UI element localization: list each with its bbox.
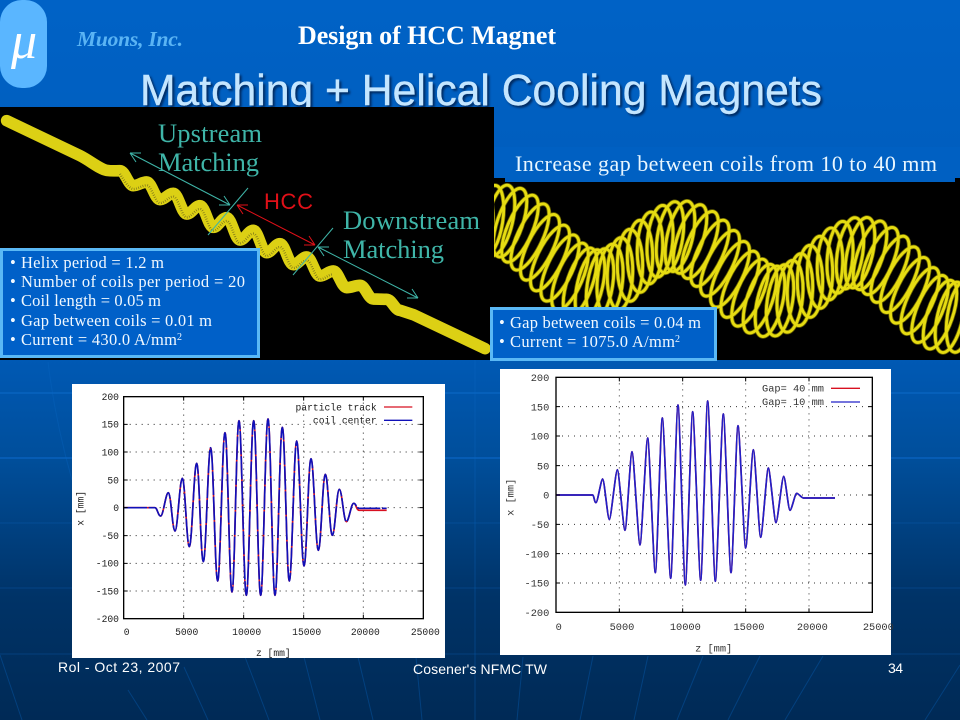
chart: gap 40 mm vs gap 10 mm: 150: [531, 402, 549, 414]
chart: gap 40 mm vs gap 10 mm: -150: [525, 579, 549, 591]
chart: particle track vs coil center: z [mm]: [256, 648, 291, 659]
chart: particle track vs coil center: -100: [96, 559, 119, 570]
title: Matching + Helical Cooling Magnets: [140, 66, 822, 115]
chart: particle track vs coil center: 200: [102, 392, 119, 403]
chart: gap 40 mm vs gap 10 mm: -100: [525, 549, 549, 561]
chart: particle track vs coil center: x [mm]: [75, 491, 86, 526]
label: downstream matching: Matching: [343, 234, 444, 264]
panel: left parameter box: •: [10, 311, 16, 330]
panel: right parameter box: •: [499, 332, 505, 351]
footer: page number: 34: [888, 660, 903, 676]
panel: left parameter box: 2: [177, 332, 182, 343]
chart: particle track vs coil center: particle track: [296, 403, 377, 414]
arrow: upstream matching: [130, 153, 248, 235]
panel: left parameter box: Helix period = 1.2 m: [21, 253, 164, 272]
panel: left parameter box: Gap between coils = 0.01 m: [21, 311, 212, 330]
panel: left parameter box: Coil length = 0.05 m: [21, 291, 161, 310]
label: upstream matching: Upstream: [158, 118, 262, 148]
chart: gap 40 mm vs gap 10 mm: 20000: [797, 622, 828, 634]
chart: particle track vs coil center: -50: [102, 531, 119, 542]
panel: left parameter box: •: [10, 272, 16, 291]
panel: left parameter box: [2, 250, 258, 356]
panel: left parameter box: Current = 430.0 A/mm: [21, 330, 177, 349]
panel: left parameter box: •: [10, 253, 16, 272]
chart: gap 40 mm vs gap 10 mm: [500, 369, 894, 656]
chart: gap 40 mm vs gap 10 mm: 5000: [610, 622, 634, 634]
chart: gap 40 mm vs gap 10 mm: z [mm]: [695, 644, 732, 656]
panel: left parameter box: Number of coils per period = 20: [21, 272, 245, 291]
panel: right parameter box: Gap between coils = 0.04 m: [510, 313, 701, 332]
panel: right parameter box: •: [499, 313, 505, 332]
label: downstream matching: Downstream: [343, 205, 480, 235]
panel: full magnet image: [0, 107, 494, 360]
panel: left parameter box: •: [10, 291, 16, 310]
chart: particle track vs coil center: -150: [96, 586, 119, 597]
chart: gap 40 mm vs gap 10 mm: 15000: [733, 622, 764, 634]
chart: gap 40 mm vs gap 10 mm: x [mm]: [505, 479, 517, 516]
icon: helical magnet overview: [7, 121, 485, 349]
panel: right parameter box: Current = 1075.0 A/mm: [510, 332, 675, 351]
chart: particle track vs coil center: 15000: [292, 627, 321, 638]
chart: particle track vs coil center: 100: [102, 447, 119, 458]
label: downstream matching: [343, 205, 480, 264]
panel: gap heading: [494, 147, 960, 182]
arrow: downstream matching: [293, 228, 418, 298]
chart: gap 40 mm vs gap 10 mm: Gap= 10 mm: [762, 397, 824, 409]
logo: mu badge: [0, 0, 47, 88]
chart: gap 40 mm vs gap 10 mm: -50: [531, 520, 549, 532]
chart: particle track vs coil center: [72, 384, 445, 659]
chart: particle track vs coil center: -200: [96, 614, 119, 625]
chart: gap 40 mm vs gap 10 mm: Gap= 40 mm: [762, 384, 824, 396]
panel: gap heading: Increase gap between coils from 10 to 40 mm: [515, 151, 937, 176]
chart: particle track vs coil center: 5000: [175, 627, 198, 638]
chart: particle track vs coil center: coil center: [313, 415, 377, 426]
chart: gap 40 mm vs gap 10 mm: 0: [556, 622, 562, 634]
chart: gap 40 mm vs gap 10 mm: 50: [537, 461, 549, 473]
panel: left parameter box: •: [10, 330, 16, 349]
chart: gap 40 mm vs gap 10 mm: 200: [531, 373, 549, 385]
chart: particle track vs coil center: 10000: [232, 627, 261, 638]
chart: particle track vs coil center: 25000: [411, 627, 440, 638]
label: upstream matching: [158, 118, 262, 177]
chart: gap 40 mm vs gap 10 mm: -200: [525, 608, 549, 620]
heading: Design of HCC Magnet: [298, 21, 556, 50]
label: HCC: HCC: [264, 189, 313, 214]
company name: Muons, Inc.: [76, 27, 183, 51]
footer: event: Cosener's NFMC TW: [413, 661, 548, 677]
icon: coil close-up: [464, 182, 960, 355]
panel: coil close-up image: [464, 178, 960, 360]
chart: particle track vs coil center: 20000: [351, 627, 380, 638]
label: upstream matching: Matching: [158, 147, 259, 177]
chart: gap 40 mm vs gap 10 mm: 25000: [863, 622, 894, 634]
chart: particle track vs coil center: 0: [124, 627, 130, 638]
footer: date: Rol - Oct 23, 2007: [58, 659, 180, 675]
panel: right parameter box: [492, 308, 716, 360]
chart: gap 40 mm vs gap 10 mm: 0: [543, 491, 549, 503]
chart: gap 40 mm vs gap 10 mm: 10000: [670, 622, 701, 634]
panel: right parameter box: 2: [675, 334, 680, 345]
chart: gap 40 mm vs gap 10 mm: 100: [531, 432, 549, 444]
chart: particle track vs coil center: 0: [113, 503, 119, 514]
arrow: HCC: [237, 205, 315, 245]
chart: particle track vs coil center: 150: [102, 420, 119, 431]
chart: particle track vs coil center: 50: [107, 475, 119, 486]
logo: mu badge: μ: [10, 13, 37, 70]
